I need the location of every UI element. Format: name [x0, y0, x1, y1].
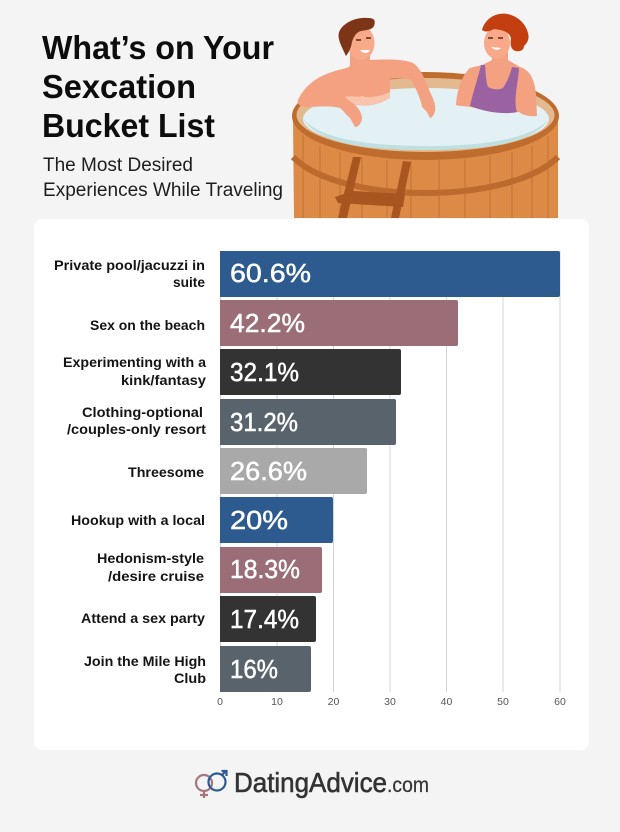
subtitle [43, 155, 283, 201]
ladder [335, 157, 411, 218]
water [303, 88, 549, 150]
x axis labels [217, 696, 566, 708]
bar: private pool: suite [173, 274, 205, 290]
bar: clothing optional: Clothing-optional [82, 404, 203, 420]
x axis labels: 10 [271, 696, 283, 708]
bar: hookup: Hookup with a local [71, 512, 205, 528]
bar: sex party: 17.4% [230, 604, 299, 634]
title: Sexcation [42, 68, 196, 105]
bar: clothing optional [67, 399, 396, 445]
title: Bucket List [42, 107, 215, 144]
bar: cruise: Hedonism-style [97, 550, 204, 566]
bar: hookup: 20% [230, 505, 288, 535]
tub rim [292, 72, 559, 160]
bar: private pool: 60.6% [230, 258, 311, 288]
bar: sex on the beach: 42.2% [230, 308, 305, 338]
woman [456, 14, 537, 116]
bar: threesome: 26.6% [230, 456, 307, 486]
bar: sex party: Attend a sex party [81, 610, 205, 626]
subtitle: Experiences While Traveling [43, 180, 283, 201]
x axis labels: 20 [328, 696, 339, 708]
logo: DatingAdvice [234, 767, 387, 798]
bar: kink [63, 349, 401, 395]
title [42, 29, 274, 144]
bar: mile high [84, 646, 311, 692]
bar: sex party [81, 596, 316, 642]
x axis labels: 30 [384, 696, 396, 708]
icon: gender symbols [196, 771, 226, 798]
logo: .com [387, 774, 429, 797]
bar: cruise: 18.3% [230, 554, 300, 584]
panel: chart card [34, 219, 589, 750]
bar: private pool: Private pool/jacuzzi in [54, 257, 205, 273]
bar: cruise: /desire cruise [108, 568, 204, 584]
bar: threesome [128, 448, 367, 494]
x axis labels: 60 [554, 696, 566, 708]
grid lines [220, 251, 560, 692]
bar: kink: Experimenting with a [63, 354, 206, 370]
bar: kink: 32.1% [230, 357, 299, 387]
title: What’s on Your [42, 29, 274, 66]
bar: sex on the beach: Sex on the beach [90, 317, 205, 333]
bar: mile high: Join the Mile High [84, 653, 206, 669]
bar: mile high: 16% [230, 654, 278, 684]
man [298, 18, 435, 127]
bar: private pool [54, 251, 560, 297]
bar: hookup [71, 497, 333, 543]
subtitle: The Most Desired [43, 155, 193, 176]
bar: threesome: Threesome [128, 464, 204, 480]
x axis labels: 40 [441, 696, 452, 708]
bar: clothing optional: 31.2% [230, 407, 298, 437]
bar: cruise [97, 547, 322, 593]
x axis labels: 50 [497, 696, 509, 708]
bar: sex on the beach [90, 300, 458, 346]
bar: clothing optional: /couples-only resort [67, 421, 206, 437]
tub body [293, 118, 558, 218]
bar: kink: kink/fantasy [121, 372, 206, 388]
bar: mile high: Club [174, 670, 206, 686]
x axis labels: 0 [217, 696, 223, 708]
illustration: couple in wooden hot tub [292, 14, 559, 218]
